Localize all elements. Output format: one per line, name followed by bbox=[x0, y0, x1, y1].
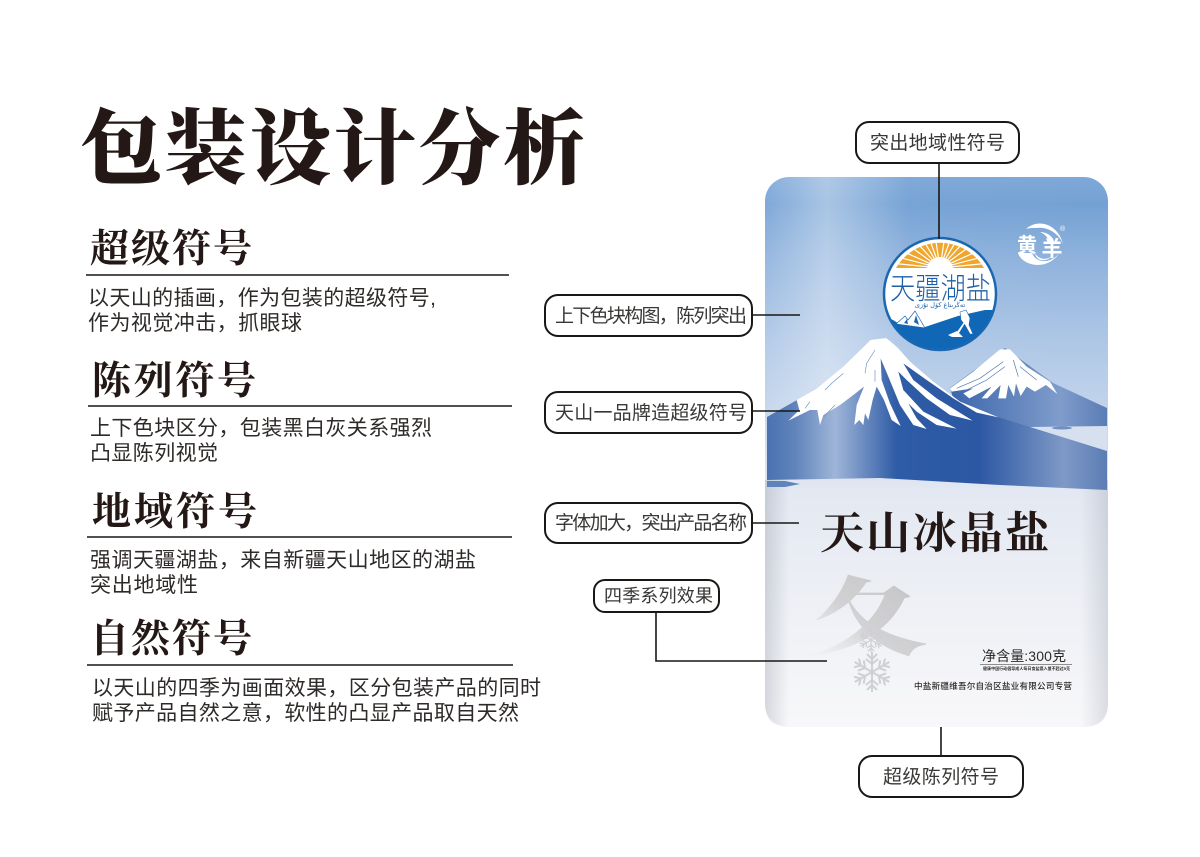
text block: super symbol bbox=[88, 287, 436, 335]
manufacturer: 中盐新疆维吾尔自治区盐业有限公司专营 bbox=[914, 680, 1072, 691]
text block: display symbol: 凸显陈列视觉 bbox=[90, 442, 218, 465]
text block: super symbol: 以天山的插画，作为包装的超级符号, bbox=[88, 287, 436, 310]
product name: 天山冰晶盐 bbox=[820, 509, 1051, 558]
icon: mountain and salt worker bbox=[891, 310, 992, 349]
heading: regional symbol: 地域符号 bbox=[92, 491, 257, 534]
callout: product name: 字体加大，突出产品名称 bbox=[555, 512, 747, 534]
net weight: 健康中国行动倡导成人每日食盐摄入量不超过5克 bbox=[983, 665, 1070, 671]
panel: super symbol bbox=[86, 228, 509, 335]
callout: brand symbol bbox=[545, 392, 800, 433]
text block: nature symbol: 赋予产品自然之意，软性的凸显产品取自天然 bbox=[92, 702, 519, 725]
net weight: 净含量:300克 bbox=[982, 648, 1066, 664]
callout: super display symbol bbox=[859, 727, 1023, 797]
callout: regional symbol: 突出地域性符号 bbox=[870, 132, 1005, 154]
panel: regional symbol bbox=[87, 491, 512, 597]
text block: nature symbol: 以天山的四季为画面效果，区分包装产品的同时 bbox=[92, 677, 541, 700]
logo: Tianjiang Lake Salt badge bbox=[884, 222, 996, 352]
title: 包装设计分析 bbox=[80, 104, 585, 195]
logo: Huangyang brand: 黄 bbox=[1017, 234, 1037, 257]
panel: display symbol bbox=[88, 360, 512, 465]
text block: display symbol bbox=[90, 417, 432, 465]
infographic canvas bbox=[82, 106, 1108, 798]
net weight bbox=[980, 648, 1072, 671]
heading: super symbol: 超级符号 bbox=[90, 228, 252, 271]
callout: brand symbol: 天山一品牌造超级符号 bbox=[555, 402, 747, 424]
icon: rising sun bbox=[896, 242, 984, 268]
panel: nature symbol bbox=[87, 618, 541, 725]
callout: regional symbol bbox=[856, 122, 1019, 239]
callout: color block layout: 上下色块构图，陈列突出 bbox=[555, 305, 747, 327]
illustration: Tianshan mountains bbox=[767, 338, 1107, 490]
callout: color block layout bbox=[545, 295, 800, 336]
heading: nature symbol: 自然符号 bbox=[90, 618, 252, 661]
logo: Huangyang brand bbox=[1017, 224, 1066, 265]
heading: display symbol: 陈列符号 bbox=[92, 360, 256, 403]
logo: Huangyang brand: ® bbox=[1060, 225, 1066, 233]
callout: seasonal series bbox=[594, 580, 827, 661]
text block: regional symbol bbox=[90, 549, 476, 597]
logo wordmark: 天疆湖盐 bbox=[890, 273, 991, 306]
text block: display symbol: 上下色块区分，包装黑白灰关系强烈 bbox=[90, 417, 432, 440]
callout: seasonal series: 四季系列效果 bbox=[604, 586, 713, 606]
callout: product name bbox=[545, 503, 799, 543]
logo: Huangyang brand: 羊 bbox=[1042, 238, 1062, 261]
icon: snowflakes bbox=[852, 628, 892, 692]
panel: product pouch bbox=[765, 177, 1108, 727]
text block: regional symbol: 突出地域性 bbox=[90, 574, 198, 597]
text block: super symbol: 作为视觉冲击，抓眼球 bbox=[88, 312, 302, 335]
callout: super display symbol: 超级陈列符号 bbox=[883, 766, 999, 788]
logo: Tianjiang Lake Salt badge: تەڭرىتاغ كۆل تۇزى bbox=[915, 301, 965, 309]
season character: winter: 夂 bbox=[806, 571, 928, 667]
text block: nature symbol bbox=[92, 677, 541, 725]
text block: regional symbol: 强调天疆湖盐，来自新疆天山地区的湖盐 bbox=[90, 549, 476, 572]
